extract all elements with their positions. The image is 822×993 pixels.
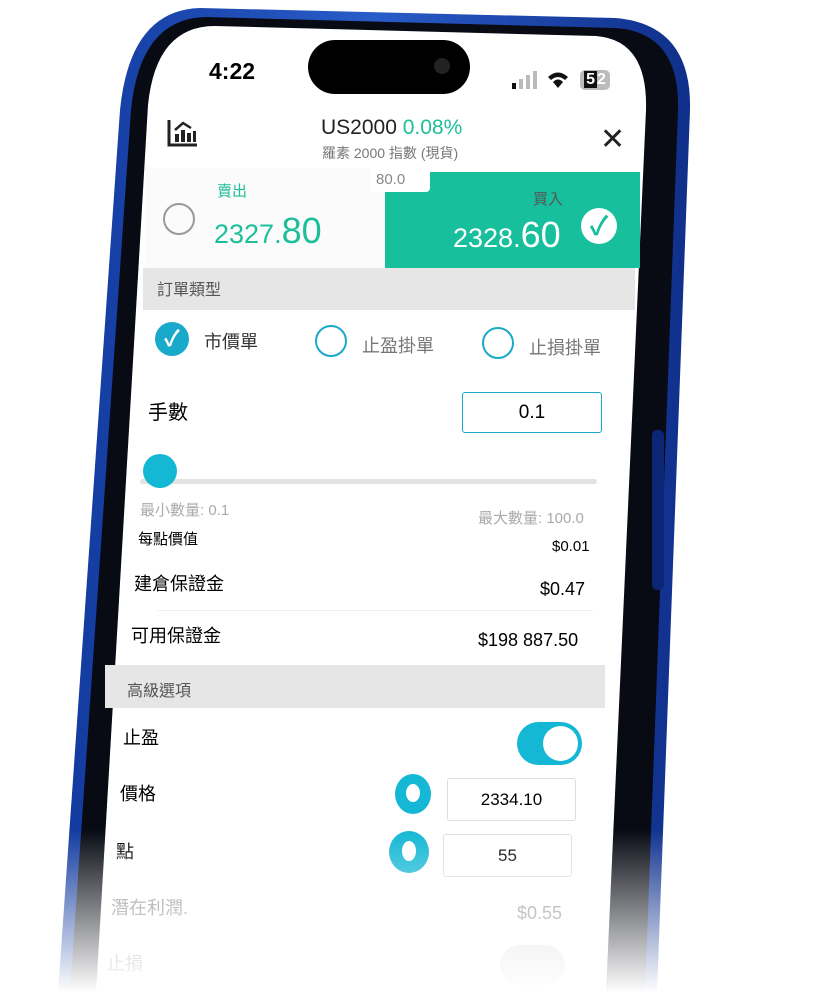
icon: wifi bbox=[548, 72, 568, 88]
bottom fade bbox=[58, 836, 662, 993]
order type band: 訂單類型 bbox=[157, 282, 221, 299]
header: US2000 0.08% bbox=[321, 116, 462, 139]
potential profit: $0.55 bbox=[517, 903, 562, 923]
margins bbox=[131, 574, 593, 650]
order type radios: ✓ bbox=[164, 326, 180, 351]
margins: $198 887.50 bbox=[478, 630, 578, 650]
margins: $0.47 bbox=[540, 579, 585, 599]
order type radios bbox=[155, 322, 601, 359]
potential profit: 潛在利潤. bbox=[111, 898, 188, 918]
margins: 可用保證金 bbox=[131, 626, 221, 646]
order type band bbox=[143, 268, 635, 310]
take profit: 55 bbox=[498, 846, 517, 865]
take profit: 2334.10 bbox=[481, 790, 542, 809]
lots: 0.1 bbox=[519, 402, 545, 423]
sell buy: 2327.80 bbox=[214, 210, 322, 251]
take profit: 點 bbox=[116, 842, 134, 862]
slider: 每點價值 bbox=[138, 531, 198, 548]
take profit: 止盈 bbox=[123, 728, 159, 748]
advanced band bbox=[105, 665, 605, 708]
sell buy: 賣出 bbox=[217, 183, 247, 200]
header bbox=[168, 116, 625, 161]
header: ✕ bbox=[600, 123, 625, 156]
sell buy bbox=[163, 171, 640, 268]
order type radios: 市價單 bbox=[204, 332, 258, 352]
status bar: 52 bbox=[586, 71, 606, 88]
margins: 建倉保證金 bbox=[134, 574, 224, 594]
icon: chart bbox=[168, 120, 197, 146]
sell buy: 2328.60 bbox=[453, 214, 561, 255]
potential profit bbox=[107, 898, 562, 974]
slider: 最小數量: 0.1 bbox=[140, 502, 229, 519]
header: 羅素 2000 指數 (現貨) bbox=[322, 145, 458, 161]
order type radios: 止盈掛單 bbox=[362, 336, 434, 356]
take profit bbox=[116, 722, 582, 877]
status bar bbox=[209, 40, 610, 94]
order type radios: 止損掛單 bbox=[529, 338, 601, 358]
slider: $0.01 bbox=[552, 538, 590, 555]
potential profit: 止損 bbox=[107, 954, 143, 974]
take profit: 價格 bbox=[120, 784, 156, 804]
lots bbox=[148, 392, 602, 433]
sell buy: 買入 bbox=[533, 191, 563, 208]
lots: 手數 bbox=[148, 402, 188, 424]
advanced band: 高級選項 bbox=[127, 683, 191, 700]
slider bbox=[138, 454, 597, 555]
icon: signal bbox=[512, 71, 537, 89]
sell buy: 80.0 bbox=[376, 171, 405, 188]
status bar: 4:22 bbox=[209, 58, 255, 84]
slider: 最大數量: 100.0 bbox=[478, 510, 584, 527]
sell buy: ✓ bbox=[590, 211, 608, 241]
